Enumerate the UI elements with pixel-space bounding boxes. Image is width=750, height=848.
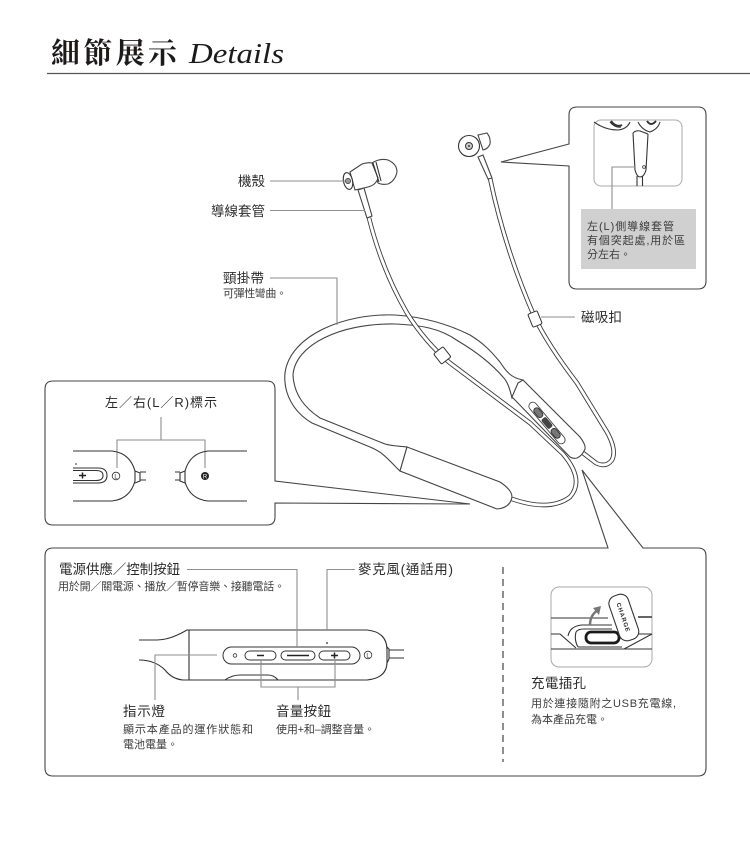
charging port label: 用於連接隨附之USB充電線, [531,696,676,710]
neckband [285,315,523,471]
inset: charging port [551,587,652,667]
note box: L side tube bump: 分左右。 [587,247,631,261]
inset: charging port: CHARGE [615,602,630,633]
neckband earphones illustration [285,133,614,509]
title: 細節展示 [51,37,179,70]
power control label: 電源供應／控制按鈕 [59,561,180,577]
left earbud cable [369,218,576,505]
power control label: 用於開／關電源、播放／暫停音樂、接聽電話。 [58,579,285,593]
leader lines: main illustration [270,181,575,325]
label: housing: 機殼 [238,174,266,189]
right earbud [458,133,492,179]
indicator label: 電池電量。 [123,738,178,751]
charging port label [531,676,676,726]
note box: L side tube bump [581,209,696,269]
control pod [139,630,404,680]
dashed divider [502,567,504,762]
control pod with buttons [512,380,585,458]
leader lines: controls [155,570,355,700]
panel: controls and charging [45,470,706,776]
panel: left cable tube detail [501,107,706,289]
left pod end: L [114,474,118,480]
control pod: L [366,654,370,660]
volume label: 使用+和–調整音量。 [276,722,375,736]
panel: left right markings [45,381,470,525]
volume label [276,703,375,736]
indicator label [123,704,253,751]
left pod end [73,451,146,501]
left earbud [342,159,397,218]
title [47,37,750,74]
indicator label: 顯示本產品的運作狀態和 [123,722,253,736]
microphone label: 麥克風(通話用) [358,561,453,577]
indicator label: 指示燈 [123,704,166,719]
inset: left tube close-up [594,120,682,209]
magnetic clip left [434,347,451,364]
right pod end [175,451,247,501]
label: neckband: 可彈性彎曲。 [223,286,287,300]
charging port label: 充電插孔 [531,676,586,691]
label: neckband [223,271,287,300]
note box: L side tube bump: 左(L)側導線套管 [587,219,674,233]
label: magnetic clasp: 磁吸扣 [581,310,622,325]
title: Details [188,38,284,70]
label: neckband: 頸掛帶 [223,271,264,286]
charging port label: 為本產品充電。 [531,712,608,726]
right earbud cable [490,178,614,465]
label: cable tube: 導線套管 [211,203,265,219]
right pod end: R [203,474,208,480]
heading: left right markings: 左／右(L／R)標示 [105,395,217,410]
power control label [58,561,285,593]
note box: L side tube bump: 有個突起處,用於區 [587,233,685,247]
magnetic clip right [528,311,542,327]
volume label: 音量按鈕 [276,703,331,719]
leader lines: markings [117,417,205,468]
battery pod [400,447,512,509]
